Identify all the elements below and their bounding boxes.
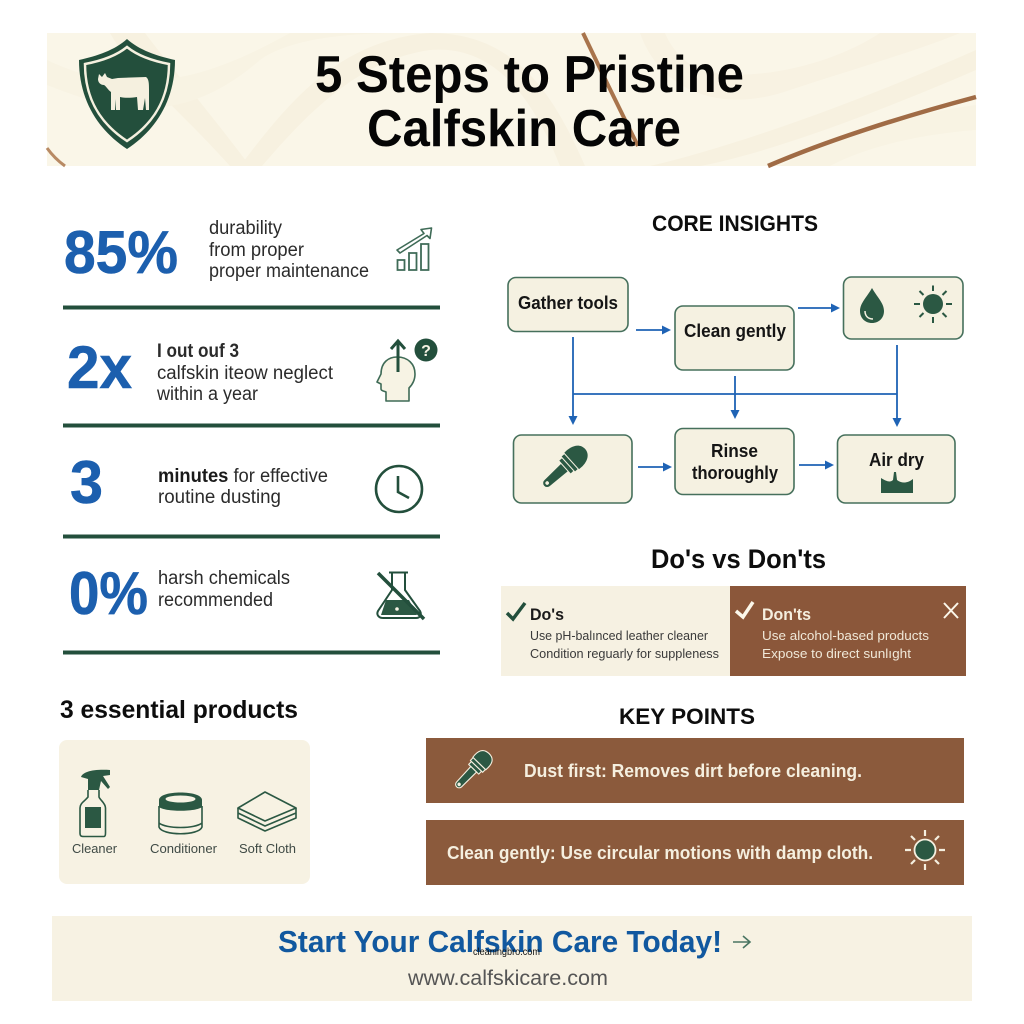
icon: crossed-out flask xyxy=(377,572,424,619)
flow diagram xyxy=(508,277,963,503)
icon: clock xyxy=(376,466,422,512)
icon: white cross xyxy=(944,603,958,618)
icon: white check xyxy=(736,602,753,617)
footer call to action: cleaningbro.com xyxy=(473,946,540,958)
step: air dry: Air dry xyxy=(869,450,924,470)
step: clean gently xyxy=(675,306,794,370)
step: water and sun icons xyxy=(844,277,963,339)
footer call to action: Start Your Calfskin Care Today! xyxy=(278,924,722,959)
panel: do's: Do's xyxy=(530,605,564,624)
stat: 3 minutes: 3 xyxy=(70,449,103,516)
title: 5 Steps to Pristine xyxy=(315,46,744,104)
stat: 0% harsh chemicals: recommended xyxy=(158,590,273,611)
stat: 2x neglect: I out ouf 3 xyxy=(157,341,239,362)
stat: 85% durability: from proper xyxy=(209,240,305,261)
panel: do's: Use pH-balınced leather cleaner xyxy=(530,628,709,643)
stat: 85% durability: 85% xyxy=(64,219,178,286)
step: brush icon xyxy=(514,435,632,503)
footer call to action xyxy=(52,916,972,1001)
step: rinse thoroughly: Rinse xyxy=(711,441,758,461)
stat: 85% durability: proper maintenance xyxy=(209,261,369,282)
icon: jar conditioner xyxy=(150,792,218,856)
stat: 85% durability: durability xyxy=(209,218,282,239)
step: rinse thoroughly: thoroughly xyxy=(692,463,778,483)
stat: 0% harsh chemicals: harsh chemicals xyxy=(158,568,290,589)
stat: 0% harsh chemicals xyxy=(69,560,290,627)
stat: 3 minutes: minutes for effective xyxy=(158,466,328,487)
icon: spray bottle cleaner: Cleaner xyxy=(72,841,118,856)
callout: dust first: Dust first: Removes dirt before cleaning. xyxy=(524,761,862,781)
stat: 3 minutes: routine dusting xyxy=(158,487,281,508)
heading: 3 essential products: 3 essential products xyxy=(60,696,298,724)
callout: dust first xyxy=(426,738,964,803)
panel: don'ts: Expose to direct sunlıght xyxy=(762,646,911,661)
icon: head with arrow and question mark xyxy=(377,338,438,401)
icon: head with arrow and question mark: ? xyxy=(421,343,431,360)
connector arrows xyxy=(568,304,902,472)
stat: 85% durability xyxy=(64,218,369,286)
stat: 2x neglect: 2x xyxy=(67,334,132,401)
panel: do's xyxy=(501,586,730,676)
panel: essential products xyxy=(59,740,310,884)
icon: rising bar chart xyxy=(397,228,432,270)
step: air dry xyxy=(838,435,955,503)
icon: jar conditioner: Conditioner xyxy=(150,841,218,856)
step: rinse thoroughly xyxy=(675,428,794,494)
header banner xyxy=(47,33,976,166)
callout: clean gently: Clean gently: Use circular motions with damp cloth. xyxy=(447,843,873,863)
icon: stacked soft cloth: Soft Cloth xyxy=(239,841,296,856)
stat: 3 minutes xyxy=(70,449,328,516)
callout: clean gently xyxy=(426,820,964,885)
stat: 2x neglect xyxy=(67,334,334,405)
panel: don'ts xyxy=(730,586,966,676)
panel: do's: Condition reguarly for suppleness xyxy=(530,646,719,661)
footer call to action: www.calfskicare.com xyxy=(407,967,608,990)
step: gather tools xyxy=(508,278,628,332)
icon: shield with calf xyxy=(79,39,175,149)
icon: green check xyxy=(507,603,525,619)
panel: don'ts: Use alcohol-based products xyxy=(762,628,930,643)
heading: core insights: CORE INSIGHTS xyxy=(652,211,818,236)
stat: 2x neglect: within a year xyxy=(156,384,259,405)
stat: 0% harsh chemicals: 0% xyxy=(69,560,148,627)
panel: stats xyxy=(63,218,440,654)
heading: do's vs don'ts: Do's vs Don'ts xyxy=(651,544,826,574)
icon: dusting brush xyxy=(450,747,496,793)
heading: key points: KEY POINTS xyxy=(619,704,755,729)
icon: stacked soft cloth xyxy=(238,792,296,856)
title xyxy=(315,46,744,158)
stat: 2x neglect: calfskin iteow neglect xyxy=(157,363,334,384)
step: gather tools: Gather tools xyxy=(518,293,618,313)
step: clean gently: Clean gently xyxy=(684,321,786,341)
icon: sun xyxy=(905,830,945,870)
title: Calfskin Care xyxy=(367,100,681,158)
icon: spray bottle cleaner xyxy=(72,770,118,856)
icon: arrow xyxy=(733,936,750,948)
panel: don'ts: Don'ts xyxy=(762,605,811,624)
